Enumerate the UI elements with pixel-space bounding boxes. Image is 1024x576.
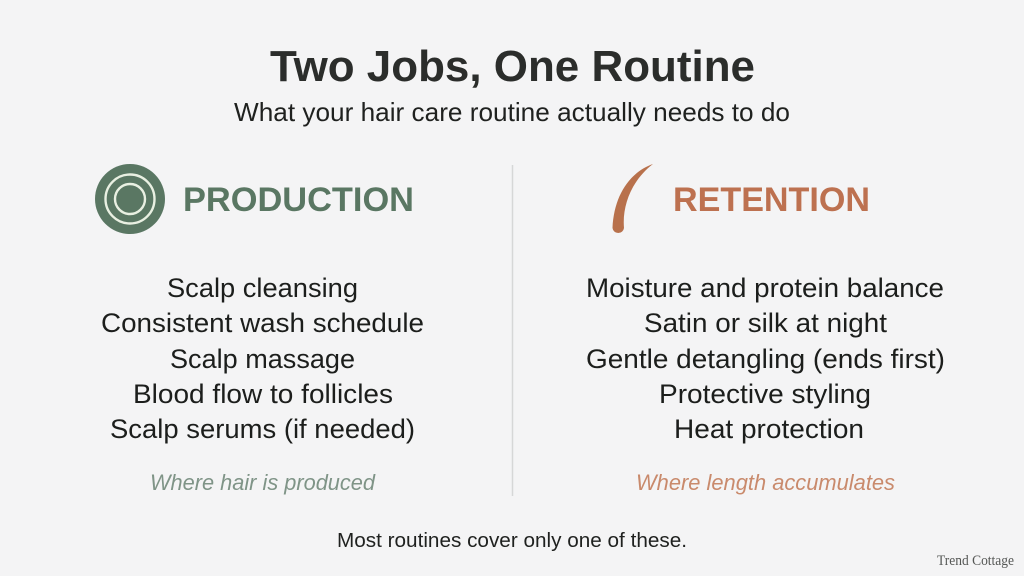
list: retention items: Satin or silk at night xyxy=(644,308,888,338)
list: retention items: Moisture and protein balance xyxy=(586,273,944,303)
list: production items: Consistent wash schedule xyxy=(101,308,424,338)
brand mark: Trend Cottage xyxy=(937,553,1014,569)
list: production items xyxy=(101,273,424,444)
list: retention items: Heat protection xyxy=(674,414,864,444)
caption: retention: Where length accumulates xyxy=(636,470,895,495)
subtitle: What your hair care routine actually needs to do xyxy=(234,97,790,127)
list: production items: Scalp massage xyxy=(170,344,355,374)
list: production items: Blood flow to follicles xyxy=(133,379,393,409)
list: retention items xyxy=(586,273,945,444)
list: retention items: Gentle detangling (ends first) xyxy=(586,344,945,374)
list: production items: Scalp serums (if needed) xyxy=(110,414,415,444)
panel: retention xyxy=(586,164,945,495)
footer note: Most routines cover only one of these. xyxy=(337,530,687,552)
icon: hair strand xyxy=(612,164,653,233)
list: production items: Scalp cleansing xyxy=(167,273,358,303)
panel: production xyxy=(95,164,424,495)
heading: production: PRODUCTION xyxy=(183,181,414,219)
icon: concentric follicle circles xyxy=(95,164,165,234)
title: Two Jobs, One Routine xyxy=(270,42,755,91)
caption: production: Where hair is produced xyxy=(150,470,376,495)
list: retention items: Protective styling xyxy=(659,379,871,409)
heading: retention: RETENTION xyxy=(673,181,870,219)
